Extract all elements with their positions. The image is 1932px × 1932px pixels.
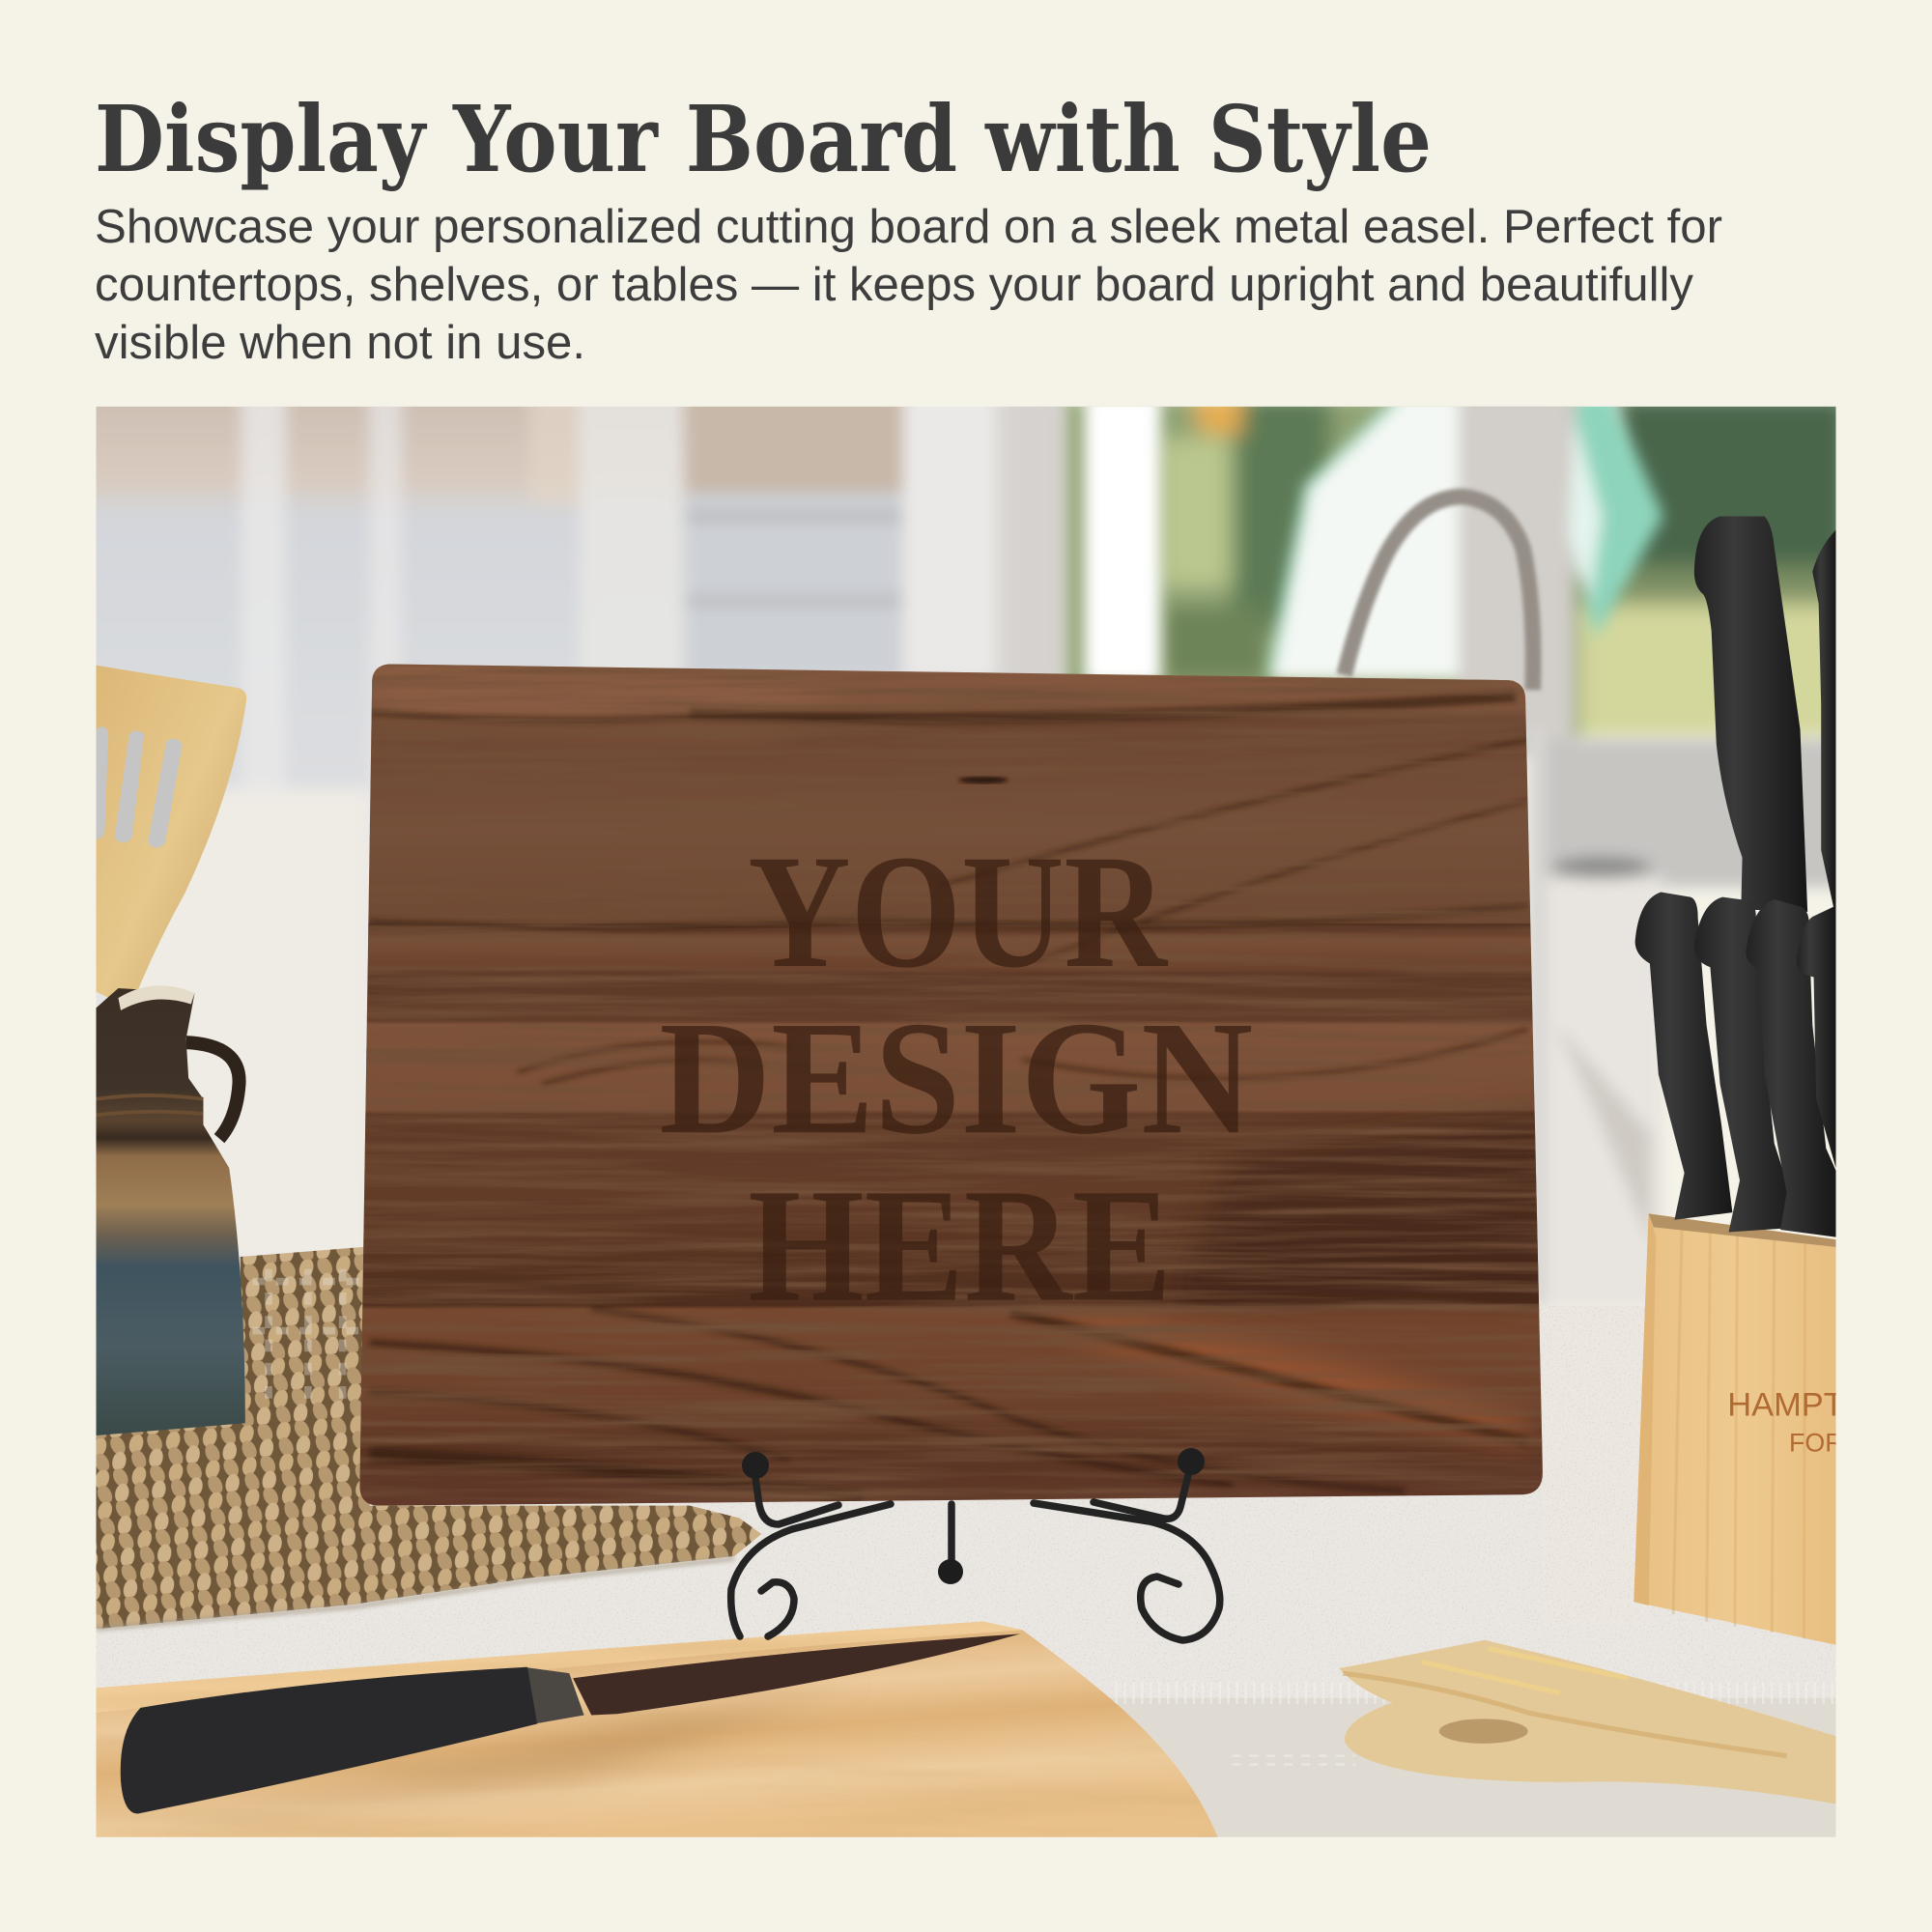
title: Display Your Board with Style [95, 86, 1432, 193]
countertop [96, 1306, 1836, 1700]
engraved design text [662, 858, 1251, 1300]
easel left hook and scroll [731, 1452, 891, 1636]
shadowed lower-right panel [1171, 1109, 1552, 1303]
walnut cutting board [352, 659, 1552, 1509]
blurred window view [1060, 394, 1851, 746]
metal easel [731, 1448, 1220, 1640]
window glare shapes [1014, 394, 1861, 1309]
wooden spoon and spatula [1339, 1640, 1836, 1804]
photo: walnut cutting board on easel in a kitchen [74, 382, 1893, 1846]
chef knife on board [121, 1634, 1020, 1824]
ceramic jug [96, 985, 245, 1435]
woven basket [96, 1244, 786, 1638]
description text [95, 201, 1722, 369]
wood knot [958, 777, 1008, 783]
blurred kitchen backdrop [97, 406, 1019, 1265]
reddish highlight streak [1035, 1312, 1528, 1448]
black knife handles [1635, 516, 1836, 1237]
description text: Showcase your personalized cutting board on a sleek metal easel. Perfect for [95, 201, 1722, 253]
dark swirling grain lines [370, 696, 1528, 1497]
slotted wooden spatula [96, 666, 246, 1008]
engraved design text: DESIGN [659, 988, 1253, 1168]
description text: visible when not in use. [95, 317, 585, 369]
top-left light patch [386, 690, 778, 729]
engraved design text: YOUR [748, 822, 1169, 1002]
knife block: HAMPTON [1727, 1387, 1893, 1424]
faucet [1345, 497, 1533, 690]
easel centre leg [938, 1504, 963, 1584]
knife block: FORGE [1789, 1429, 1881, 1458]
linen cloth with fringe [1109, 1693, 1848, 1846]
easel right hook and scroll [1034, 1448, 1220, 1640]
knife block [1634, 1213, 1835, 1645]
description text: countertops, shelves, or tables — it keeps your board upright and beautifully [95, 259, 1693, 311]
engraved design text: HERE [748, 1156, 1172, 1336]
foreground cutting board [96, 1614, 1230, 1842]
